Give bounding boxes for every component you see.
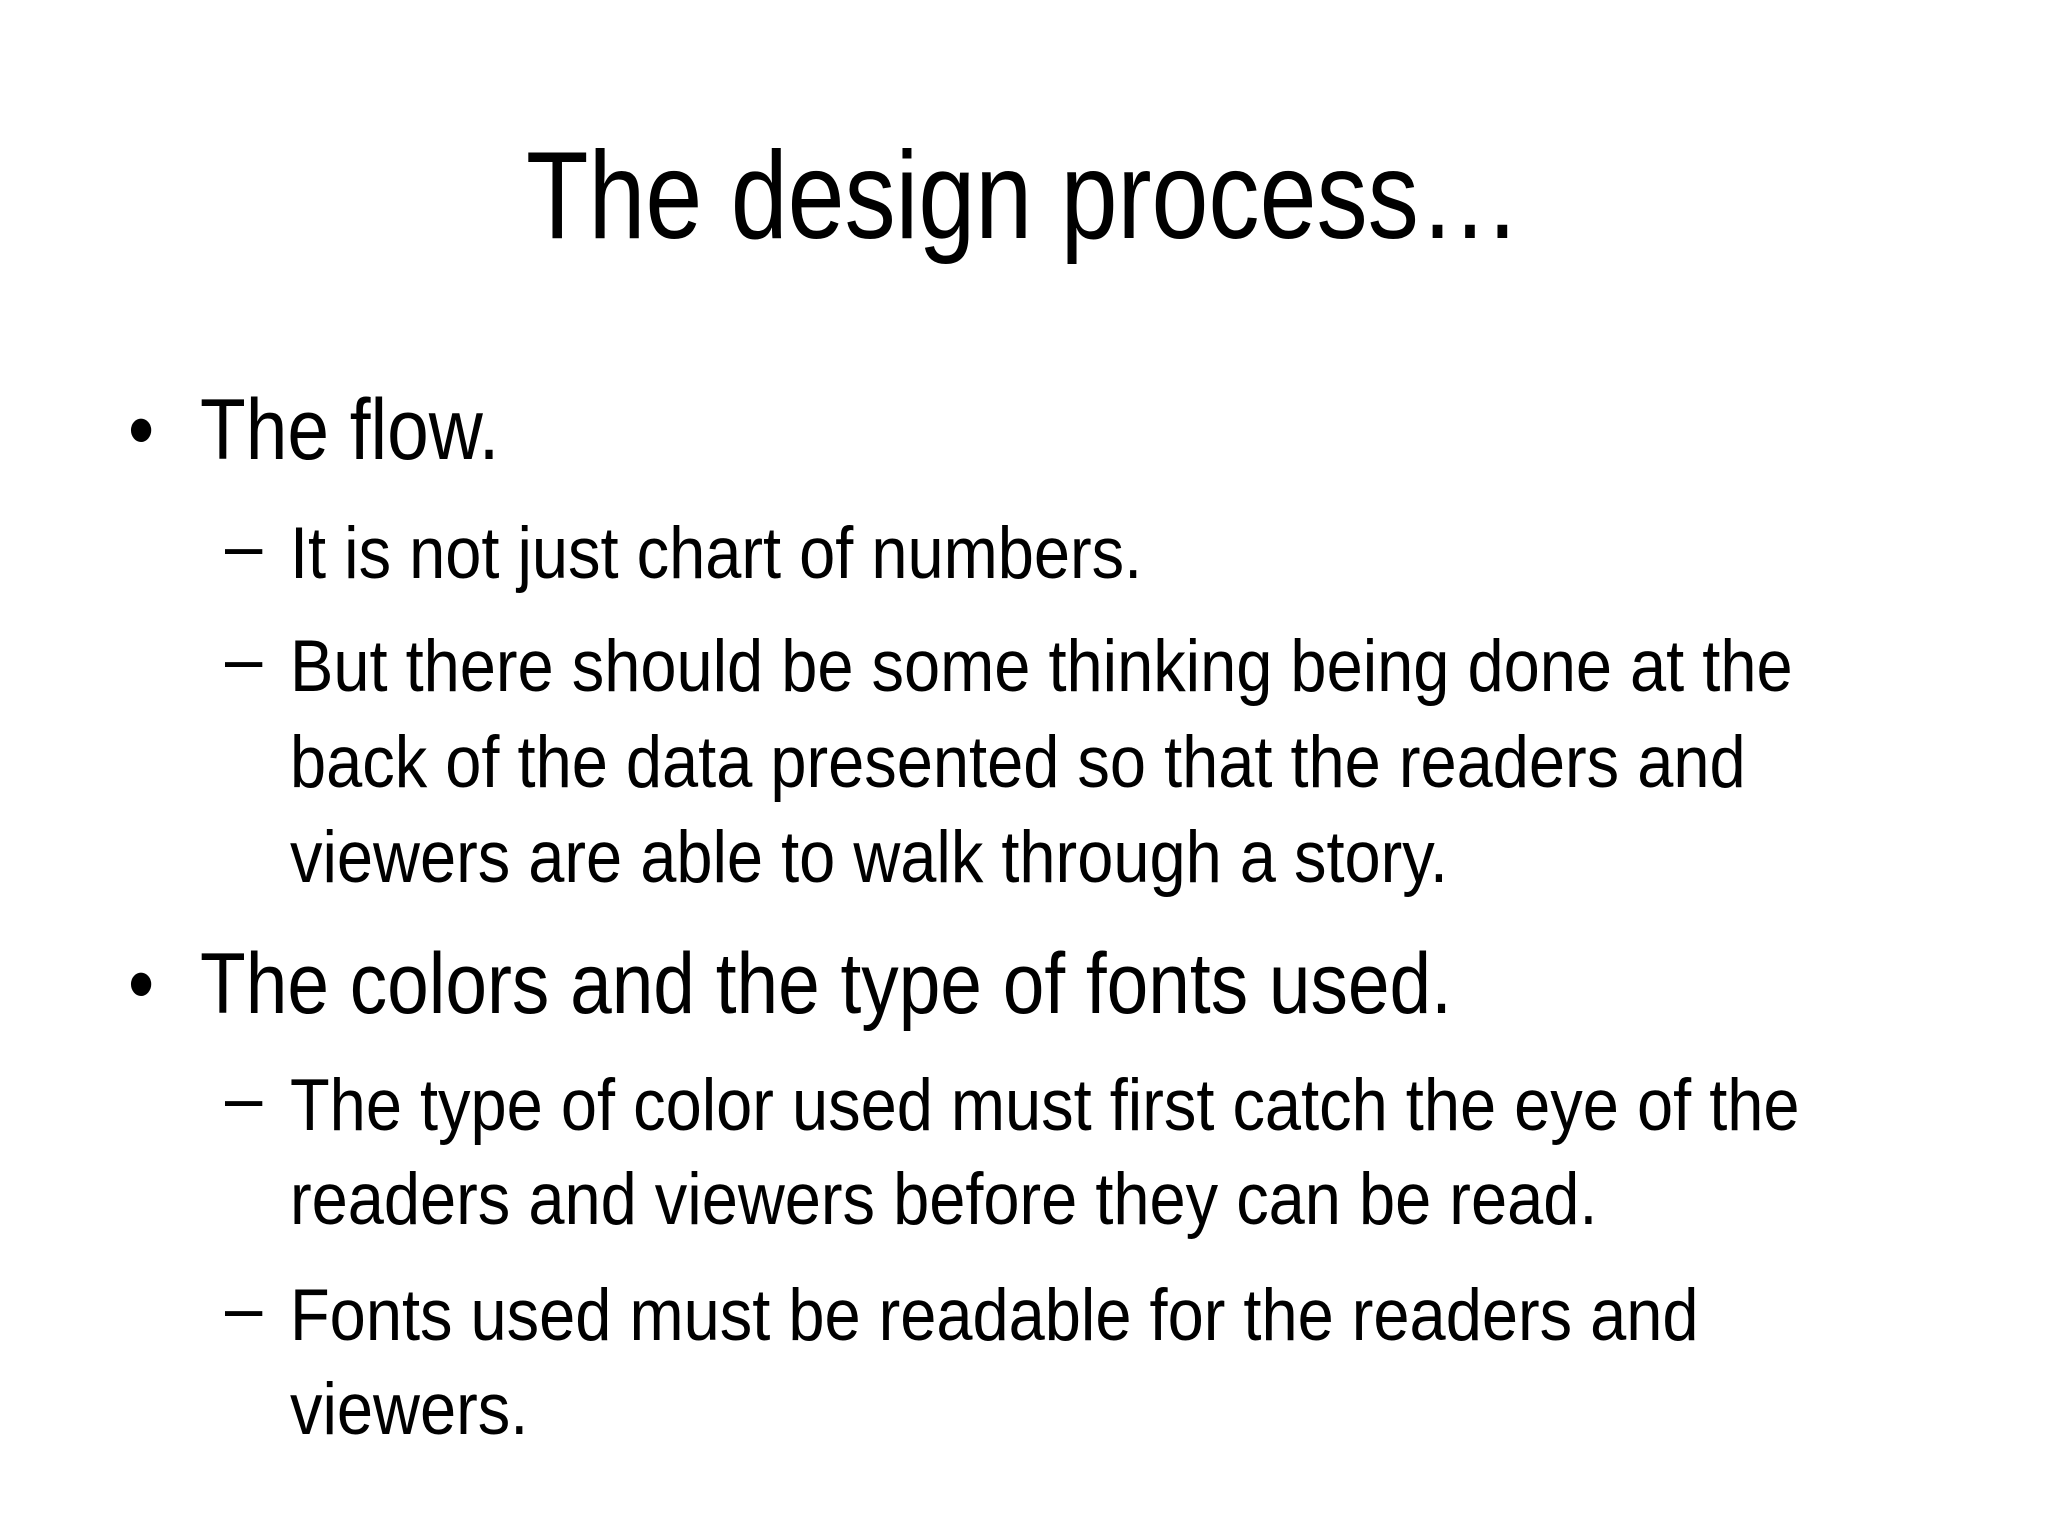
sub-point: readable fonts: – (225, 1267, 262, 1348)
sub-point: color catches eye: The type of color used must first catch the eye of the (290, 1065, 1800, 1146)
sub-point: not just chart: It is not just chart of numbers. (290, 513, 1142, 594)
bullet section: the flow (128, 382, 1793, 898)
sub-point: readable fonts (225, 1267, 1699, 1450)
sub-point: thinking behind data: viewers are able to walk through a story. (290, 817, 1448, 898)
sub-point: not just chart: – (225, 505, 262, 586)
bullet: colors and fonts: • (128, 936, 154, 1032)
sub-point: readable fonts: viewers. (290, 1369, 528, 1450)
sub-point: thinking behind data: But there should be some thinking being done at the (290, 626, 1793, 707)
bullet: colors and fonts: The colors and the type of fonts used. (200, 936, 1452, 1032)
sub-point: color catches eye (225, 1057, 1800, 1240)
sub-point: thinking behind data: – (225, 618, 262, 699)
sub-point: readable fonts: Fonts used must be readable for the readers and (290, 1275, 1699, 1356)
sub-point: color catches eye: – (225, 1057, 262, 1138)
bullet: The flow: The flow. (200, 382, 499, 478)
sub-point: thinking behind data (225, 618, 1793, 898)
sub-point: thinking behind data: back of the data presented so that the readers and (290, 722, 1746, 803)
bullet section: colors and fonts (128, 936, 1800, 1450)
sub-point: color catches eye: readers and viewers before they can be read. (290, 1159, 1597, 1240)
bullet: The flow: • (128, 382, 154, 478)
title: The design process… (526, 127, 1521, 265)
